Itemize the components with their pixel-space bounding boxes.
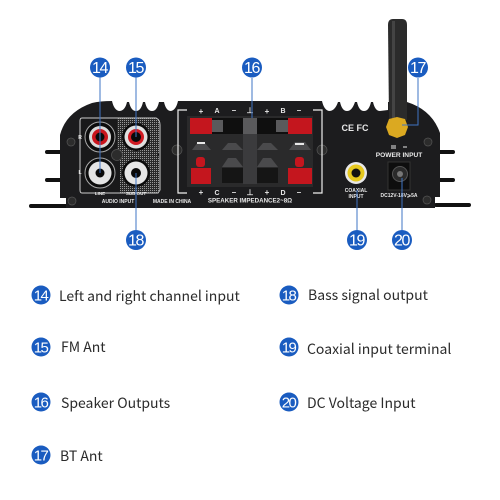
panel printed labels: C	[214, 190, 220, 197]
panel printed labels: +	[199, 107, 204, 116]
panel printed labels: –	[232, 106, 237, 115]
callout badge 14	[90, 58, 110, 78]
connector: dc jack	[388, 162, 410, 190]
power polarity symbol	[391, 146, 407, 148]
callout badge 19: 19	[349, 232, 365, 250]
callout badge 18: 18	[128, 232, 144, 250]
legend item 20: DC Voltage Input	[307, 393, 416, 413]
panel printed labels: +	[265, 188, 270, 197]
socket: L channel	[85, 158, 115, 188]
rca panel outline	[80, 118, 160, 193]
legend item 15: 15	[34, 340, 48, 356]
speaker terminal bracket	[178, 110, 322, 193]
mounting screws	[67, 138, 432, 205]
callout badge 16: 16	[244, 60, 260, 77]
connector: gold bt antenna	[386, 117, 408, 138]
legend item 14: Left and right channel input	[59, 286, 241, 306]
panel printed labels: ⊥	[247, 188, 254, 197]
antenna	[388, 19, 407, 120]
socket: R channel	[85, 122, 115, 152]
callout badge 20: 20	[394, 232, 410, 250]
legend item 16: Speaker Outputs	[61, 393, 171, 413]
side fins	[31, 152, 469, 206]
sub out dotted area	[117, 118, 160, 192]
panel printed labels: +	[199, 188, 204, 197]
panel printed labels: B	[280, 108, 286, 115]
legend item 15: FM Ant	[61, 337, 106, 357]
panel printed labels: L	[78, 170, 82, 176]
amplifier rear panel	[31, 19, 469, 208]
callout badge 17: 17	[410, 60, 426, 77]
panel printed labels: +	[265, 107, 270, 116]
socket: FM ant	[122, 123, 150, 151]
callout badge 15	[126, 58, 146, 78]
legend item 14: 14	[34, 288, 48, 304]
panel printed labels: CE FC	[342, 123, 369, 133]
callout badge 16	[242, 58, 262, 78]
panel printed labels: –	[232, 188, 237, 197]
legend item 18: 18	[282, 288, 296, 304]
legend item 16: 16	[34, 394, 48, 412]
connector: coaxial yellow	[345, 162, 367, 184]
panel printed labels: SPEAKER IMPEDANCE2~8Ω	[208, 198, 292, 204]
callout badge 15: 15	[128, 60, 144, 77]
leader lines	[100, 77, 418, 230]
red terminals	[190, 118, 312, 184]
panel printed labels: R	[78, 135, 82, 141]
panel printed labels: ⊥	[247, 106, 254, 115]
legend item 15	[32, 337, 106, 357]
socket: sub out	[122, 159, 150, 187]
panel printed labels: MADE IN CHINA	[153, 199, 192, 205]
panel printed labels: DC12V-18V⩾5A	[380, 193, 418, 199]
legend item 18: Bass signal output	[308, 285, 429, 305]
panel printed labels: LINE	[95, 191, 105, 196]
speaker terminal block	[187, 116, 313, 187]
legend item 19: Coaxial input terminal	[307, 339, 451, 359]
panel printed labels	[78, 106, 422, 205]
gray terminals	[192, 142, 311, 167]
legend item 17: BT Ant	[60, 446, 103, 466]
panel printed labels: SUB OUT	[126, 191, 146, 196]
callout badge 14: 14	[92, 60, 108, 77]
legend item 19: 19	[282, 340, 296, 356]
legend item 20: 20	[282, 394, 296, 412]
chassis	[60, 101, 440, 208]
callout badge 20	[392, 230, 412, 250]
legend item 17	[32, 446, 103, 466]
panel printed labels: –	[297, 188, 302, 197]
panel printed labels: INPUT	[348, 194, 364, 200]
panel printed labels: D	[280, 190, 286, 197]
callout badge 18	[126, 230, 146, 250]
panel printed labels: POWER INPUT	[376, 152, 422, 159]
panel printed labels: AUDIO INPUT	[102, 199, 134, 205]
callout badge 17	[408, 58, 428, 78]
panel printed labels: A	[214, 108, 220, 115]
panel printed labels: COAXIAL	[345, 188, 367, 194]
panel printed labels: –	[297, 106, 302, 115]
callout badge 19	[347, 230, 367, 250]
legend item 17: 17	[34, 448, 48, 464]
